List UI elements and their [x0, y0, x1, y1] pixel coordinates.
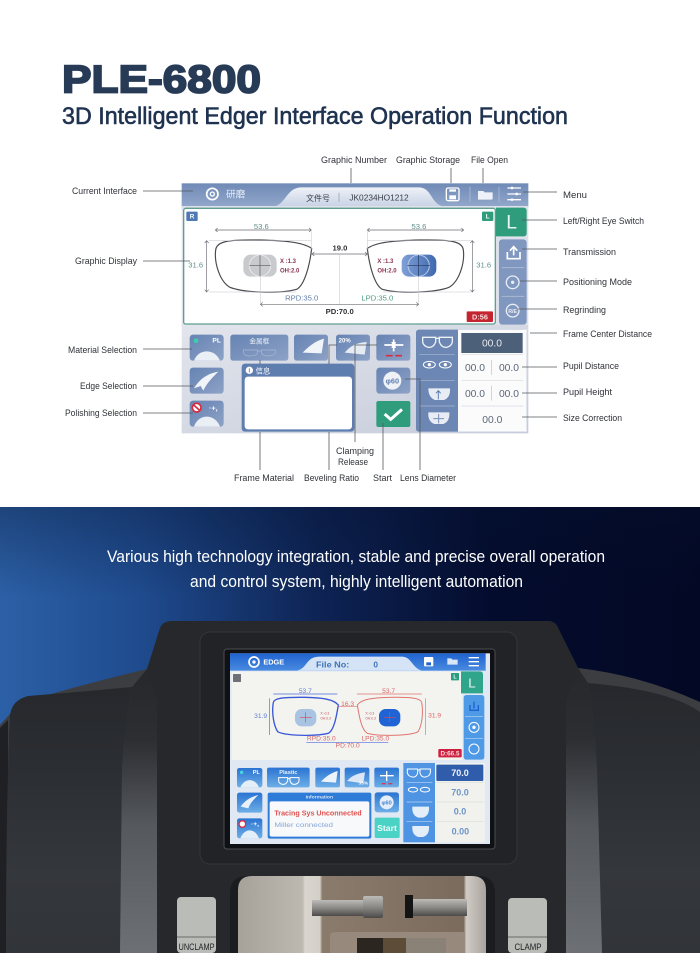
edge selection button: [190, 368, 224, 394]
measurements: 19.0: [333, 244, 347, 253]
left/right eye switch: L: [506, 212, 517, 233]
screen side buttons: L: [468, 675, 476, 690]
screen graphic display: OH:0.3: [365, 717, 376, 721]
callout labels: Polishing Selection: [65, 408, 137, 419]
screen graphic display: 53.7: [299, 688, 312, 695]
screen buttons: PL: [253, 770, 260, 776]
screen information box: Information: [306, 795, 333, 801]
screen buttons: 33%: [359, 780, 369, 785]
screen graphic display: X:-0.3: [320, 712, 329, 716]
frame material button: 金属框: [249, 336, 270, 345]
panel: interface screenshot bottom: [182, 325, 528, 433]
callout labels: Release: [338, 457, 368, 468]
screen buttons: Plastic: [279, 770, 297, 776]
beveling button: [294, 335, 328, 361]
lenses: [243, 255, 277, 277]
header bar: JK0234HO1212: [349, 194, 409, 203]
measurements: RPD:35.0: [285, 293, 318, 302]
panel: interface screenshot top: [182, 183, 528, 327]
material selection button: [190, 335, 224, 361]
screen graphic display: 31.9: [428, 712, 441, 719]
material selection button: PL: [212, 338, 221, 345]
screen buttons: φ60: [381, 801, 392, 807]
frame material button: [230, 335, 288, 361]
measurement column: [416, 330, 527, 432]
callout labels: Graphic Storage: [396, 155, 460, 166]
screen header: EDGE: [263, 658, 284, 667]
screen information box: [268, 793, 371, 839]
screen buttons: ·+,: [251, 821, 259, 828]
callout labels: Material Selection: [68, 345, 137, 356]
header bar: 研磨: [226, 190, 246, 201]
screen information box: Tracing Sys Unconnected: [274, 811, 362, 818]
leader lines: [143, 168, 557, 470]
callout labels: File Open: [471, 155, 508, 166]
graphic display panel: OH:2.0: [377, 269, 397, 275]
graphic display panel: X :1.3: [377, 259, 394, 265]
title: PLE-6800: [62, 58, 261, 102]
polishing selection button: ·+,: [209, 404, 218, 413]
screen graphic display: PD:70.0: [336, 743, 360, 750]
dimension lines: [205, 228, 474, 306]
measurement column: 00.0: [499, 389, 519, 400]
screen bezel: [200, 632, 517, 864]
information box: 信息: [256, 366, 270, 375]
touch screen: [230, 653, 490, 844]
graphic display panel: [182, 206, 528, 327]
callout labels: Beveling Ratio: [304, 473, 359, 484]
measurement column: 00.0: [465, 363, 485, 374]
callout labels: Graphic Number: [321, 155, 387, 166]
clamp button: CLAMP: [514, 942, 542, 953]
measurement column: 00.0: [482, 415, 503, 426]
machine silhouette and shoulders: [0, 621, 700, 953]
callout labels: Regrinding: [563, 305, 606, 316]
lens diameter button: φ60: [386, 376, 399, 385]
information box: [242, 364, 354, 432]
screen header: 0: [373, 659, 378, 669]
beveling ratio button: [336, 335, 370, 361]
callout labels: Graphic Display: [75, 256, 137, 267]
spindles: [312, 895, 467, 953]
measurements: [188, 222, 491, 316]
measurements: LPD:35.0: [361, 293, 393, 302]
side panels: [0, 720, 8, 953]
header bar: 文件号: [306, 193, 330, 203]
blue background band: [0, 507, 700, 953]
screen side buttons: [461, 671, 484, 760]
header bar: [182, 183, 528, 207]
screen graphic display: 31.9: [254, 713, 267, 720]
screen graphic display: RPD:35.0: [307, 736, 336, 743]
screen measurement column: 0.00: [452, 826, 469, 836]
lens diameter button: [376, 368, 410, 394]
screen graphic display: LPD:35.0: [361, 736, 389, 743]
unclamp button: [177, 897, 216, 953]
screen buttons: [237, 768, 400, 838]
unclamp button: UNCLAMP: [178, 942, 214, 953]
left/right eye switch: [496, 208, 527, 236]
graphic display panel: X :1.3: [280, 259, 297, 265]
callout labels: Current Interface: [72, 186, 137, 197]
screen measurement column: 0.0: [454, 807, 466, 817]
band text: and control system, highly intelligent automation: [190, 572, 523, 591]
screen measurement column: [403, 763, 485, 842]
information box: i: [248, 369, 250, 375]
machine illustration: [0, 621, 700, 953]
callout labels: Pupil Distance: [563, 361, 619, 372]
measurements: 53.6: [412, 222, 426, 231]
screen measurement column: 70.0: [451, 787, 469, 797]
screen graphic display: X:-0.3: [365, 712, 374, 716]
graphic display panel: L: [486, 214, 490, 221]
screen graphic display: 16.3: [341, 701, 354, 708]
measurement column: 00.0: [465, 389, 485, 400]
screen graphic display: [232, 672, 462, 760]
screen measurement column: 70.0: [451, 768, 469, 778]
band text: [107, 547, 605, 591]
graphic display panel: OH:2.0: [280, 269, 300, 275]
screen header: File No:: [316, 660, 349, 670]
callout labels: Positioning Mode: [563, 277, 632, 288]
measurements: 31.6: [188, 261, 203, 270]
screen information box: Miller connected: [274, 822, 333, 829]
frames: [215, 240, 312, 292]
polishing selection button: [190, 401, 224, 427]
callout labels: Transmission: [563, 247, 616, 258]
screen buttons: Start: [377, 823, 397, 833]
screen header: [230, 653, 486, 671]
callout labels: Start: [373, 473, 392, 484]
band text: Various high technology integration, stable and precise overall operation: [107, 547, 605, 566]
callout labels: Pupil Height: [563, 387, 612, 398]
side function column: R/E: [508, 309, 518, 315]
clamping release button: [376, 335, 410, 361]
side function column: [499, 239, 527, 325]
callout labels: Frame Material: [234, 473, 294, 484]
lens chamber: [230, 876, 495, 953]
beveling ratio button: 20%: [339, 339, 351, 345]
measurements: 53.6: [254, 222, 269, 231]
screen graphic display: OH:0.3: [320, 717, 331, 721]
start button: [376, 401, 410, 427]
callout labels: Menu: [563, 190, 587, 201]
screen graphic display: 53.7: [382, 688, 395, 695]
callout labels: Clamping: [336, 446, 374, 457]
callout labels: Edge Selection: [80, 381, 137, 392]
clamp button: [508, 898, 547, 953]
measurement column: 00.0: [482, 339, 502, 350]
measurements: PD:70.0: [326, 307, 354, 316]
grey strips: [120, 669, 158, 953]
callout labels: Frame Center Distance: [563, 329, 652, 340]
callout labels: Left/Right Eye Switch: [563, 216, 644, 227]
center housing: [147, 621, 578, 953]
screen graphic display: D:66.5: [440, 751, 460, 758]
callout labels: [65, 155, 652, 484]
callout labels: Lens Diameter: [400, 473, 456, 484]
graphic display panel: D:56: [472, 313, 488, 322]
graphic display panel: R: [190, 214, 195, 221]
subtitle: 3D Intelligent Edger Interface Operation Function: [62, 103, 568, 130]
screen graphic display: L: [453, 675, 457, 681]
callout labels: Size Correction: [563, 413, 622, 424]
measurements: 31.6: [476, 261, 491, 270]
measurement column: 00.0: [499, 363, 519, 374]
